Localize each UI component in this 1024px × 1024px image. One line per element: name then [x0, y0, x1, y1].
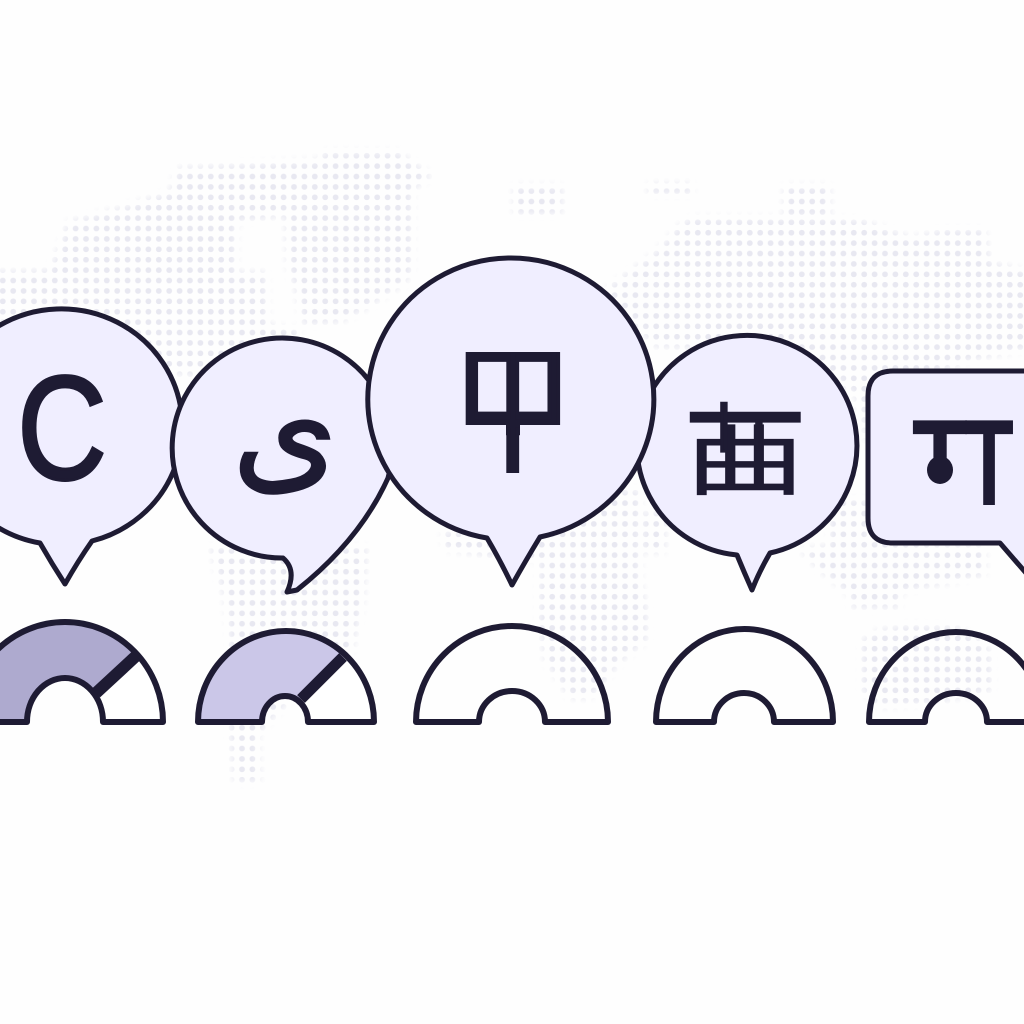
gauge 1 — [0, 622, 163, 722]
speech bubble: rounded rectangle Devanagari-like: T — [912, 395, 968, 532]
speech bubble: Arabic: ی — [232, 351, 338, 508]
speech bubble: Chinese — [637, 335, 857, 590]
speech bubble: Chinese: 一 — [685, 356, 805, 490]
speech bubble: Chinese: 丨 — [696, 399, 752, 458]
gauge 4 — [656, 629, 833, 722]
speech bubble: large centre: 中 — [457, 291, 569, 532]
speech bubble: rounded rectangle Devanagari-like — [868, 371, 1024, 595]
speech bubble: Chinese: 曲 — [686, 420, 804, 505]
speech bubble: Chinese: 丨 — [731, 418, 787, 454]
speech bubble: rounded rectangle Devanagari-like: T — [964, 395, 1014, 532]
speech bubble: large centre — [368, 258, 654, 585]
gauge 2 — [198, 631, 374, 722]
speech bubble: Latin: C — [17, 346, 107, 511]
speech bubble: Latin — [0, 309, 182, 584]
gauge 5 — [869, 632, 1024, 722]
speech bubble: Arabic — [172, 338, 392, 592]
dotted world map — [0, 153, 1023, 782]
gauge 3 — [416, 626, 608, 722]
